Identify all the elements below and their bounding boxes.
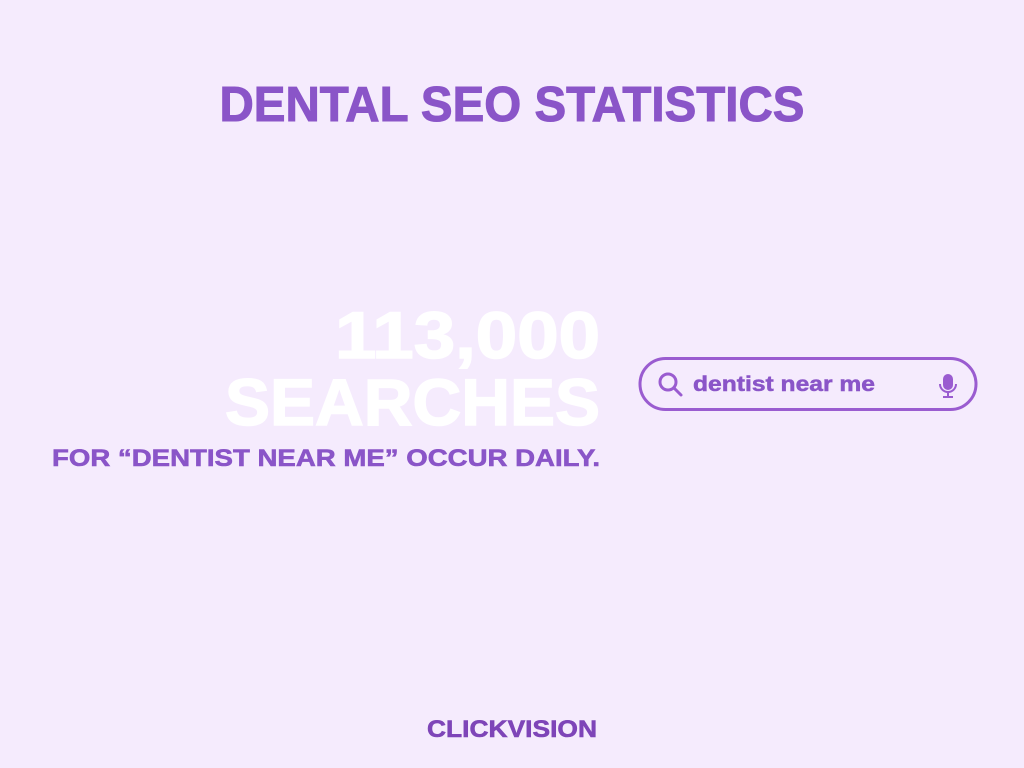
big label: SEARCHES — [225, 365, 600, 439]
search text: dentist near me — [693, 373, 875, 396]
search box — [640, 358, 976, 410]
big number: 113,000 — [335, 298, 600, 372]
subtitle: FOR “DENTIST NEAR ME” OCCUR DAILY. — [52, 445, 600, 472]
logo: CLICKVISION — [427, 716, 597, 743]
icon: microphone — [940, 375, 956, 397]
title: DENTAL SEO STATISTICS — [220, 78, 804, 132]
icon: magnifier — [660, 374, 681, 395]
